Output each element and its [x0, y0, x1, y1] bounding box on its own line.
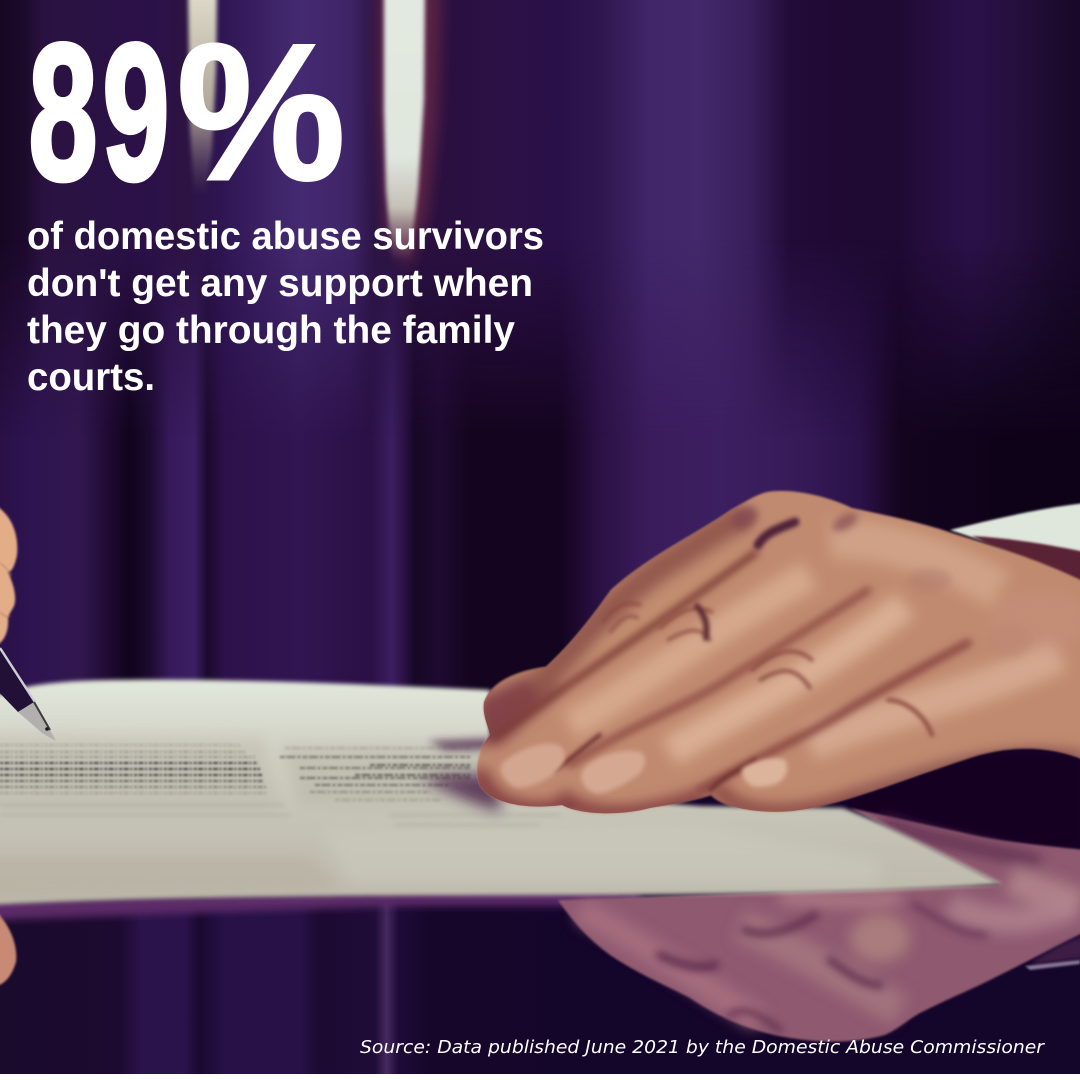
printed text on paper	[0, 745, 560, 825]
pen	[0, 642, 56, 741]
big number: 89%: %	[177, 4, 345, 221]
hand reflection	[558, 808, 1080, 1042]
statement text: courts.	[27, 356, 155, 399]
big number: 89%: 8	[28, 4, 98, 221]
finger grooves	[494, 553, 968, 790]
knuckle creases	[603, 603, 932, 735]
source note: Source: Data published June 2021 by the Domestic Abuse Commissioner	[360, 1037, 1046, 1058]
hand on paper	[476, 491, 1080, 814]
finger nails	[501, 744, 787, 793]
statement text: don't get any support when	[27, 262, 533, 305]
background: purple judge robe	[0, 0, 1080, 720]
statement text: they go through the family	[27, 309, 516, 352]
background: white shirt strips	[188, 0, 442, 270]
big number: 89%: 9	[102, 5, 169, 221]
table reflection	[0, 700, 1080, 1074]
finger shading	[476, 515, 1080, 814]
big number: 89%	[28, 4, 345, 221]
shirt cuff	[950, 503, 1080, 592]
statement text: of domestic abuse survivors	[27, 215, 544, 258]
paper reflection glow	[0, 890, 640, 920]
left hand fingers	[0, 505, 17, 646]
statement text	[27, 215, 544, 399]
finger reflection	[0, 910, 16, 987]
paper document	[0, 680, 1002, 905]
